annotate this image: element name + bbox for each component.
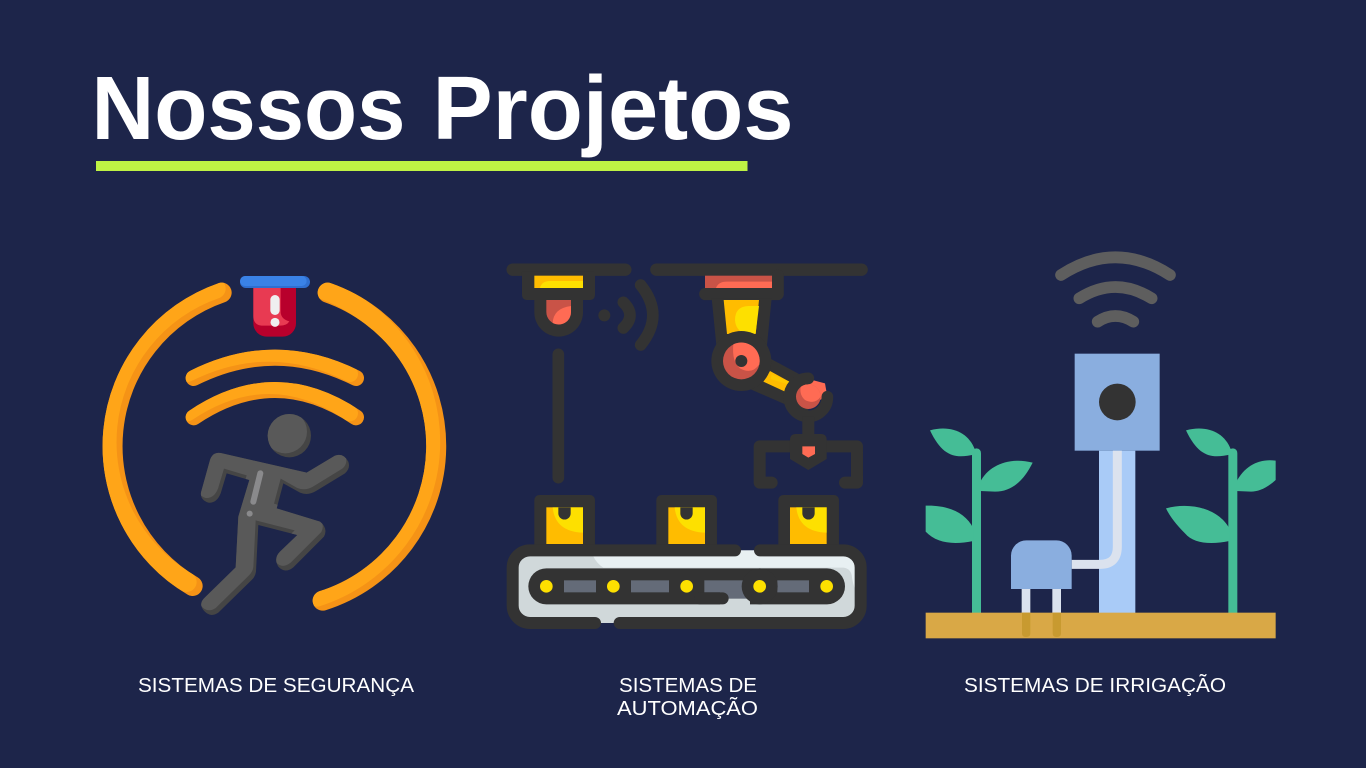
soil probe xyxy=(1011,540,1072,613)
ground xyxy=(926,613,1276,638)
sensor post xyxy=(1072,354,1160,614)
left plant xyxy=(926,429,1033,613)
overhead rails xyxy=(513,251,862,288)
robot arm xyxy=(705,276,827,416)
box 2 xyxy=(656,495,717,550)
label: automation: AUTOMAÇÃO xyxy=(617,696,758,720)
label: automation: SISTEMAS DE xyxy=(619,675,757,697)
icon: automation system top xyxy=(513,270,862,483)
running person xyxy=(198,410,349,615)
title xyxy=(92,59,794,159)
icon: conveyor belt xyxy=(513,495,861,623)
orange ring and signal waves xyxy=(107,289,436,601)
vertical guide line xyxy=(541,354,576,478)
conveyor track and rollers xyxy=(528,568,845,605)
wifi waves xyxy=(1061,257,1170,322)
label: automation xyxy=(617,675,758,720)
label: security: SISTEMAS DE SEGURANÇA xyxy=(138,675,415,697)
box 1 xyxy=(534,495,595,550)
conveyor body xyxy=(513,550,861,623)
label: irrigation: SISTEMAS DE IRRIGAÇÃO xyxy=(964,673,1226,697)
signal waves xyxy=(598,285,653,345)
box 3 xyxy=(778,495,839,550)
sensor head xyxy=(522,272,595,337)
title: Nossos xyxy=(92,59,406,159)
icon: security system xyxy=(107,276,436,615)
gripper claw xyxy=(760,417,857,483)
alarm siren xyxy=(240,276,310,337)
icon: irrigation system xyxy=(926,257,1276,638)
right plant xyxy=(1166,429,1276,613)
title underline xyxy=(96,161,748,171)
title: Projetos xyxy=(432,59,794,159)
